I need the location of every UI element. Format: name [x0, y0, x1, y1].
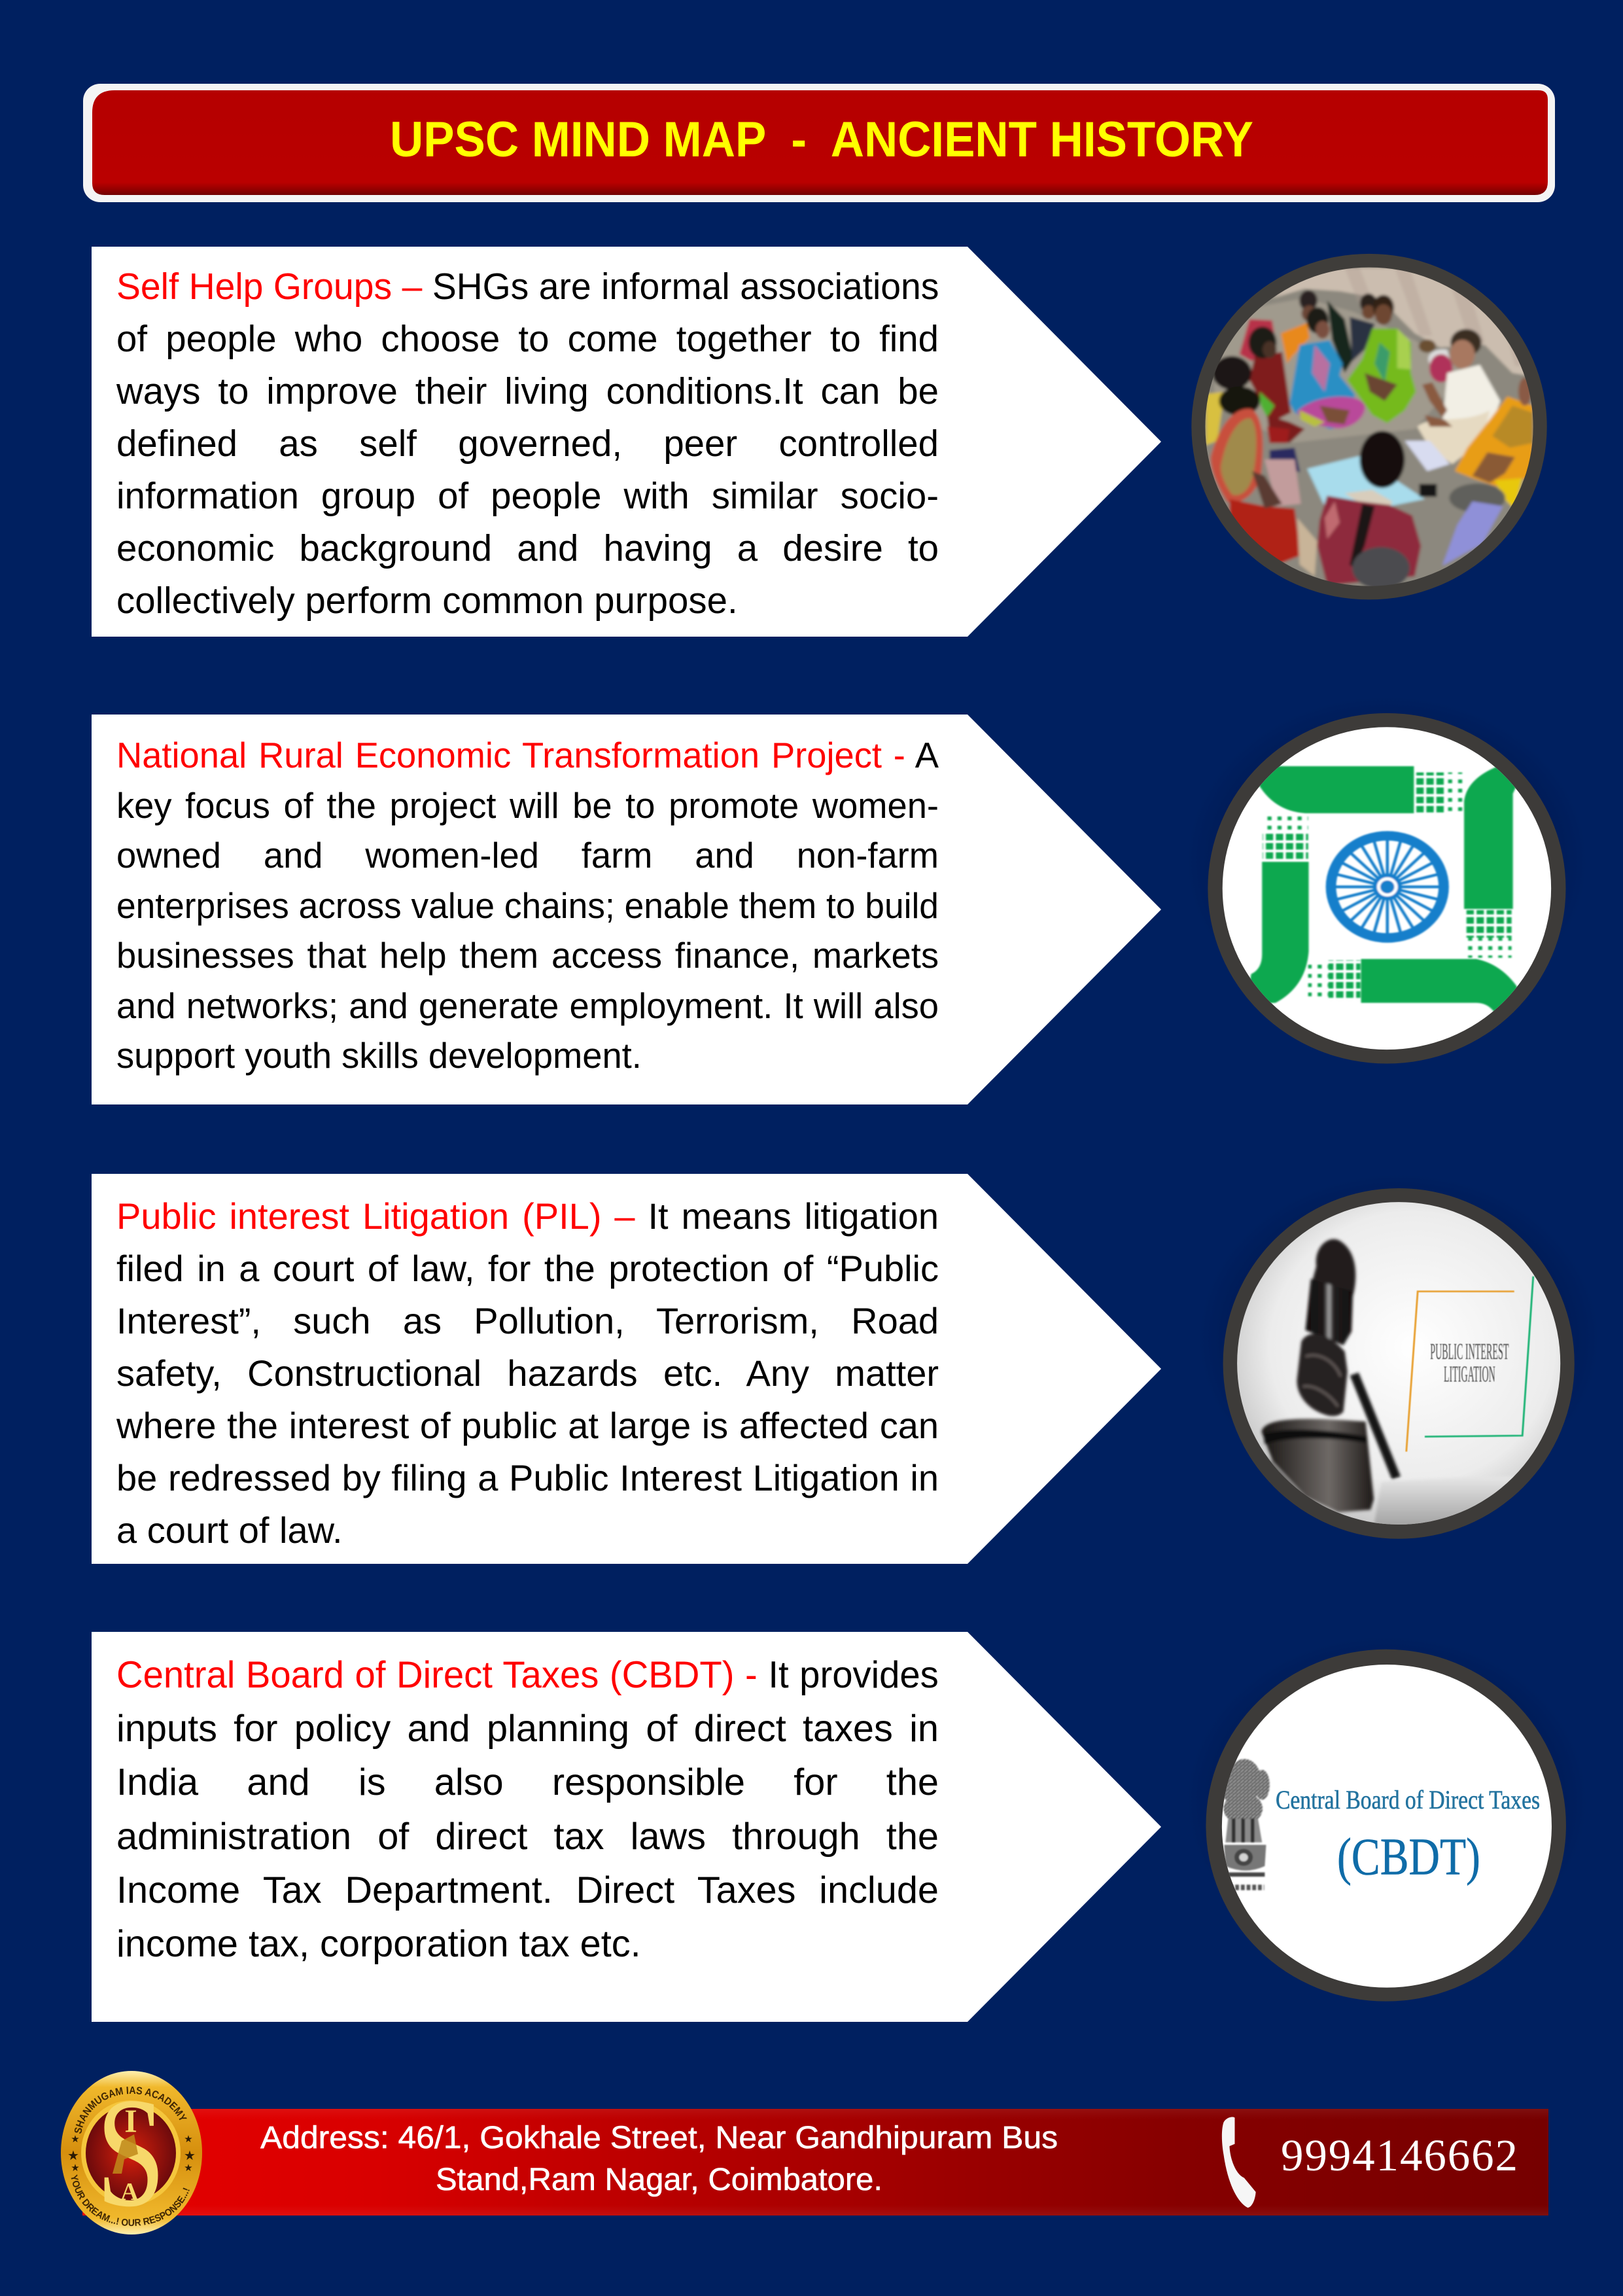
footer bar	[82, 2109, 1548, 2216]
text: self help groups description: economic background and having a desire to	[116, 527, 939, 569]
monogram letters: I	[124, 2102, 137, 2139]
text: NRETP description: support youth skills development.	[116, 1036, 642, 1076]
text: PIL description: filed in a court of law, for the protection of “Public	[116, 1248, 939, 1289]
text: NRETP description: key focus of the project will be to promote women-	[116, 785, 939, 826]
icon: CBDT logo with state emblem: Central Board of Direct Taxes	[1276, 1786, 1540, 1815]
icon: CBDT logo with state emblem	[1206, 1649, 1566, 2002]
icon: NRETP logo with chakra	[1208, 713, 1566, 1064]
stars	[67, 2133, 196, 2174]
title text: UPSC MIND MAP - ANCIENT HISTORY	[390, 112, 1253, 168]
logo: shanmugam ias academy badge	[61, 2066, 202, 2240]
stars: ★	[71, 2162, 80, 2174]
text: NRETP description: and networks; and generate employment. It will also	[116, 985, 939, 1026]
panel: central board of direct taxes	[92, 1632, 1161, 2022]
text: self help groups description: information group of people with similar socio-	[116, 475, 939, 516]
text: NRETP description: National Rural Economic Transformation Project - A	[116, 735, 939, 775]
green swirl bars	[1246, 766, 1525, 1017]
text: CBDT description: inputs for policy and planning of direct taxes in	[116, 1708, 939, 1750]
text: self help groups description: Self Help Groups – SHGs are informal associations	[116, 266, 939, 307]
text: CBDT description: India and is also responsible for the	[116, 1761, 939, 1803]
stars: ★	[67, 2147, 79, 2163]
stars: ★	[71, 2133, 80, 2145]
stars: ★	[184, 2147, 196, 2163]
panel: public interest litigation	[92, 1174, 1161, 1564]
text: self help groups description: collectively perform common purpose.	[116, 580, 738, 621]
title banner	[83, 84, 1555, 202]
stars: ★	[184, 2162, 193, 2174]
text: CBDT description: Central Board of Direct Taxes (CBDT) - It provides	[116, 1654, 939, 1696]
state emblem	[1221, 1759, 1270, 1888]
icon: telephone handset	[1222, 2117, 1256, 2208]
text: PIL description: safety, Constructional hazards etc. Any matter	[116, 1352, 939, 1394]
image: judge gavel and public interest litigation note: LITIGATION	[1444, 1362, 1495, 1386]
text: PIL description: where the interest of public at large is affected can	[116, 1405, 939, 1446]
monogram letters: S	[96, 2066, 166, 2240]
address text: Address: 46/1, Gokhale Street, Near Gandhipuram Bus	[260, 2121, 1058, 2155]
address text	[260, 2121, 1058, 2197]
text: NRETP description: owned and women-led farm and non-farm	[116, 836, 939, 875]
text: CBDT description: income tax, corporation tax etc.	[116, 1923, 641, 1965]
text: PIL description	[116, 1203, 938, 1543]
panel: national rural economic transformation project	[92, 715, 1161, 1104]
stars: ★	[184, 2133, 193, 2145]
academy motto ring text	[71, 2086, 190, 2226]
text: self help groups description: ways to improve their living conditions.It can be	[116, 370, 939, 412]
text: self help groups description	[116, 272, 938, 621]
monogram letters: A	[120, 2178, 139, 2206]
phone number: 9994146662	[1281, 2130, 1518, 2180]
text: NRETP description: enterprises across value chains; enable them to build	[116, 886, 939, 925]
image: women self help group meeting	[1191, 254, 1547, 599]
image: judge gavel and public interest litigation note	[1223, 1188, 1575, 1539]
text: NRETP description: businesses that help them access finance, markets	[116, 936, 939, 976]
panel: self help groups	[92, 247, 1161, 637]
text: CBDT description: Income Tax Department. Direct Taxes include	[116, 1869, 939, 1911]
text: NRETP description	[118, 742, 939, 1076]
ashoka chakra	[1331, 836, 1444, 938]
text: self help groups description: of people who choose to come together to find	[116, 318, 939, 359]
text: PIL description: Interest”, such as Pollution, Terrorism, Road	[116, 1300, 939, 1341]
text: PIL description: a court of law.	[116, 1510, 343, 1551]
icon: CBDT logo with state emblem: (CBDT)	[1337, 1828, 1480, 1886]
address text: Stand,Ram Nagar, Coimbatore.	[436, 2163, 882, 2197]
text: PIL description: Public interest Litigation (PIL) – It means litigation	[116, 1195, 939, 1237]
text: self help groups description: defined as self governed, peer controlled	[116, 423, 939, 464]
text: CBDT description	[118, 1661, 937, 1964]
text: CBDT description: administration of direct tax laws through the	[116, 1816, 939, 1858]
academy motto ring text: YOUR DREAM...! OUR RESPONSE...!	[71, 2174, 190, 2226]
academy motto ring text: SHANMUGAM IAS ACADEMY	[75, 2086, 187, 2134]
text: PIL description: be redressed by filing a Public Interest Litigation in	[116, 1457, 939, 1498]
